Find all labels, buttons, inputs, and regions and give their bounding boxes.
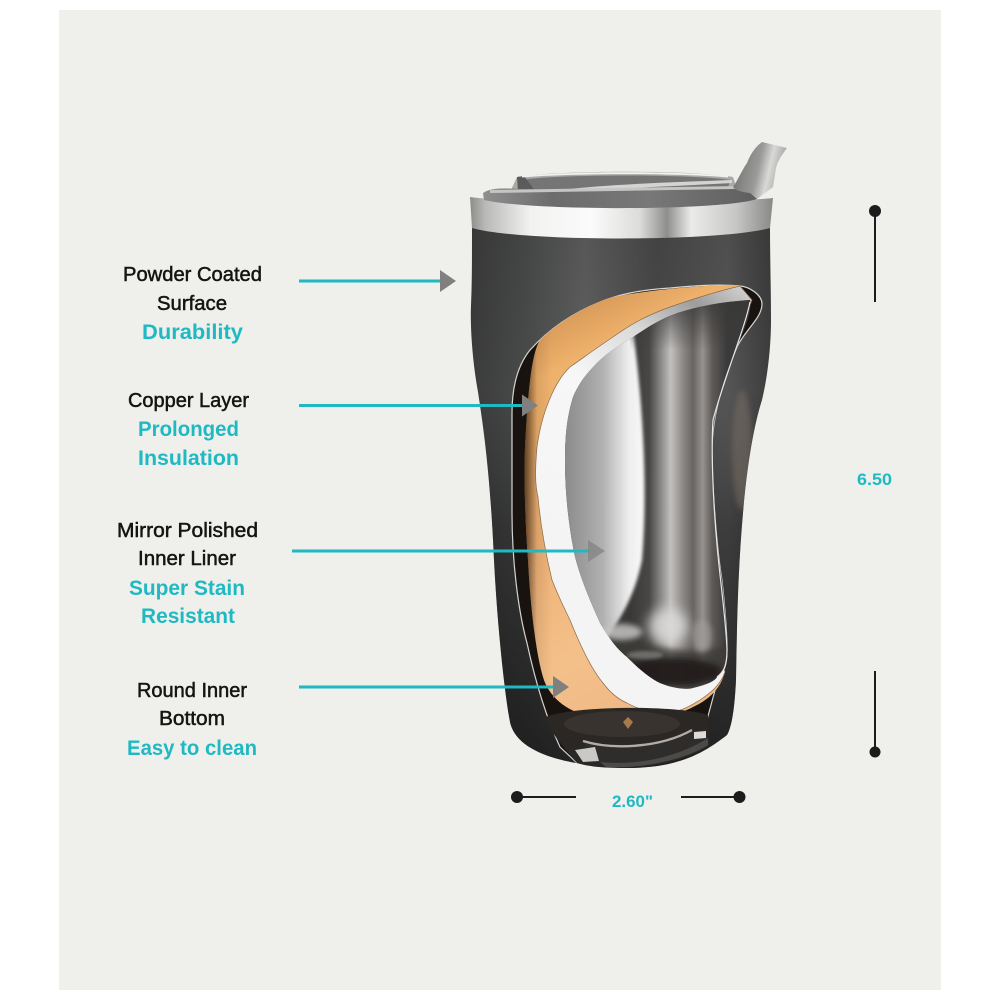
label: powder coated surface: Powder Coated (123, 264, 262, 286)
arrow: copper layer (299, 394, 538, 416)
label: mirror polished inner liner: Resistant (141, 605, 235, 628)
copper layer (525, 285, 745, 719)
label: round inner bottom (127, 680, 257, 760)
lid (483, 142, 787, 208)
silver rim band (470, 197, 773, 238)
height dimension: 6.50 (857, 470, 892, 489)
lid spout (733, 142, 787, 199)
arrow: round inner bottom (299, 676, 569, 698)
base of the tumbler (543, 708, 710, 768)
label: powder coated surface (123, 264, 262, 344)
arrow: powder coated surface (299, 270, 456, 292)
label: round inner bottom: Round Inner (137, 680, 247, 702)
label: copper layer: Insulation (138, 447, 239, 470)
label: copper layer: Copper Layer (128, 390, 249, 412)
label: powder coated surface: Durability (142, 321, 243, 344)
height dimension (857, 205, 892, 758)
label: mirror polished inner liner: Inner Liner (138, 548, 236, 570)
label: copper layer (128, 390, 249, 470)
width dimension (511, 791, 746, 811)
tumbler cutaway illustration (470, 142, 787, 768)
cutaway opening (512, 285, 762, 763)
label: round inner bottom: Easy to clean (127, 737, 257, 760)
label: mirror polished inner liner (117, 520, 258, 628)
width dimension: 2.60" (612, 792, 653, 811)
polished rim of inner liner (536, 286, 752, 713)
label: mirror polished inner liner: Super Stain (129, 577, 245, 600)
mirror polished inner liner (560, 295, 755, 700)
tumbler body (471, 228, 771, 768)
label: mirror polished inner liner: Mirror Polished (117, 520, 258, 542)
label: powder coated surface: Surface (157, 293, 227, 315)
arrow: mirror polished inner liner (292, 540, 605, 562)
label: copper layer: Prolonged (138, 418, 239, 441)
label: round inner bottom: Bottom (159, 708, 225, 730)
